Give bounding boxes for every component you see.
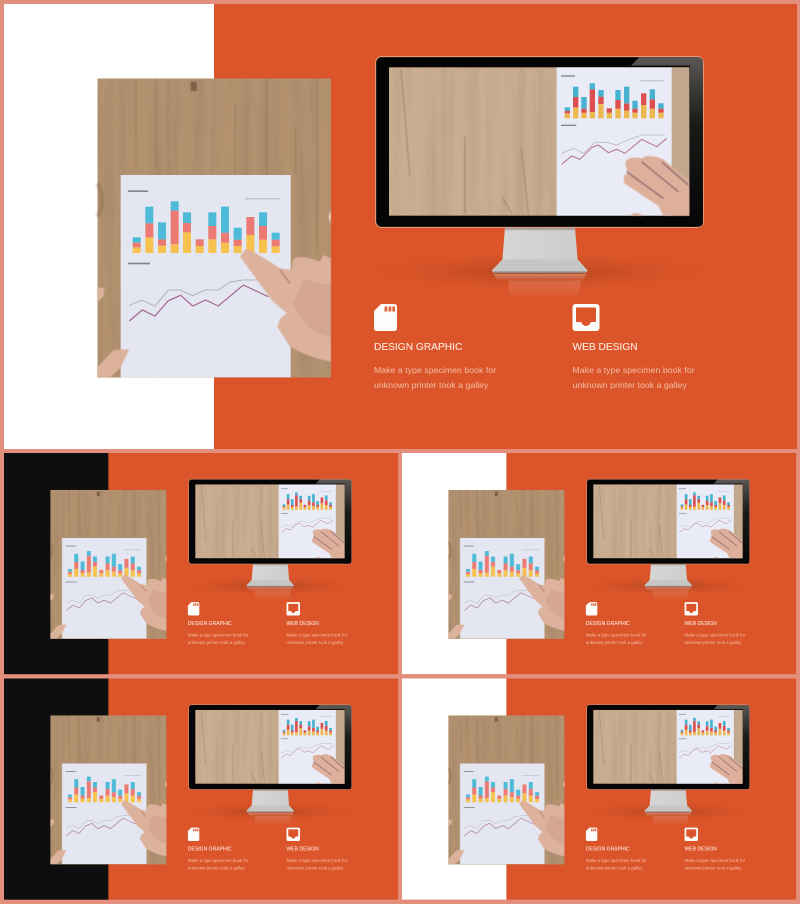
text block: design graphic description: unknown printer took a galley bbox=[374, 380, 489, 390]
icon: memory card bbox=[374, 304, 397, 331]
panel: small slide, white band, bottom right: DESIGN GRAPHIC bbox=[586, 846, 630, 852]
panel: small slide, black band, bottom left: unknown printer took a galley bbox=[188, 865, 246, 870]
panel: small slide, white band, top right: WEB DESIGN bbox=[685, 621, 717, 627]
panel background: orange bbox=[4, 4, 797, 449]
panel: small slide, white band, bottom right: Make a type specimen book for bbox=[586, 858, 647, 863]
panel: small slide, black band, top left: DESIGN GRAPHIC bbox=[188, 621, 232, 627]
panel: small slide, white band, bottom right: unknown printer took a galley bbox=[586, 865, 644, 870]
panel: small slide, black band, bottom left bbox=[4, 678, 398, 900]
left band: white bbox=[4, 4, 214, 449]
panel: small slide, black band, bottom left: DESIGN GRAPHIC bbox=[188, 846, 232, 852]
panel: small slide, white band, top right: DESIGN GRAPHIC bbox=[586, 621, 630, 627]
panel: small slide, white band, top right: unknown printer took a galley bbox=[685, 640, 742, 645]
panel: small slide, white band, top right: unknown printer took a galley bbox=[586, 640, 644, 645]
icon: inbox tray bbox=[572, 304, 600, 331]
panel: small slide, black band, bottom left: WEB DESIGN bbox=[287, 846, 319, 852]
panel: small slide, white band, top right bbox=[402, 453, 796, 674]
panel: small slide, white band, top right: Make a type specimen book for bbox=[685, 632, 746, 637]
panel: small slide, white band, bottom right: Make a type specimen book for bbox=[685, 858, 746, 863]
panel: small slide, black band, bottom left: unknown printer took a galley bbox=[287, 865, 344, 870]
photo: hand pointing at printed charts on wood desk bbox=[97, 78, 331, 377]
heading: web design: WEB DESIGN bbox=[572, 342, 638, 353]
panel: small slide, black band, top left: unknown printer took a galley bbox=[287, 640, 344, 645]
panel: main slide bbox=[4, 4, 797, 449]
text block: web design description: unknown printer took a galley bbox=[572, 380, 688, 390]
panel: small slide, black band, top left: WEB DESIGN bbox=[287, 621, 319, 627]
panel: small slide, black band, top left: unknown printer took a galley bbox=[188, 640, 246, 645]
panel: small slide, white band, bottom right: unknown printer took a galley bbox=[685, 865, 742, 870]
panel: small slide, black band, bottom left: Make a type specimen book for bbox=[287, 858, 348, 863]
panel: small slide, black band, top left: Make a type specimen book for bbox=[287, 632, 348, 637]
panel: small slide, black band, bottom left: Make a type specimen book for bbox=[188, 858, 249, 863]
heading: design graphic: DESIGN GRAPHIC bbox=[374, 342, 462, 353]
text block: design graphic description: Make a type specimen book for bbox=[374, 365, 496, 375]
monitor showing chart photo bbox=[350, 57, 730, 298]
panel: small slide, black band, top left: Make a type specimen book for bbox=[188, 632, 249, 637]
panel: small slide, white band, bottom right bbox=[402, 678, 796, 900]
panel: small slide, white band, top right: Make a type specimen book for bbox=[586, 632, 647, 637]
text block: web design description: Make a type specimen book for bbox=[572, 365, 695, 375]
panel: small slide, white band, bottom right: WEB DESIGN bbox=[685, 846, 717, 852]
panel: small slide, black band, top left bbox=[4, 453, 398, 674]
